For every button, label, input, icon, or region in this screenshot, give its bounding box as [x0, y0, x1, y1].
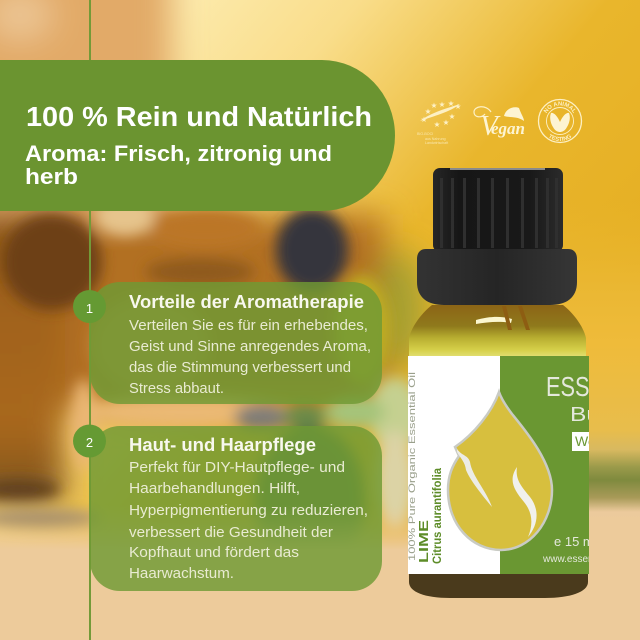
bottle glass shoulder — [409, 305, 586, 358]
icon: EU organic leaf — [417, 99, 462, 145]
panel 1 body text: Stress abbaut. — [129, 381, 224, 397]
number badge 2 — [73, 424, 106, 458]
icon: EU organic leaf: ★ — [443, 118, 450, 127]
subtitle — [25, 141, 332, 189]
bottle — [407, 168, 604, 598]
subtitle: Aroma: Frisch, zitronig und — [25, 141, 332, 166]
drop emblem — [448, 392, 552, 550]
number badge 1: 1 — [86, 301, 93, 316]
icon: EU organic leaf: ★ — [434, 120, 441, 129]
label side text: Citrus aurantifolia — [432, 467, 444, 564]
icon: EU organic leaf: ★ — [439, 100, 446, 109]
icon: no animal testing: TESTING — [549, 134, 572, 141]
icon: EU organic leaf: ★ — [421, 115, 428, 124]
panel 2 body text: Haarbehandlungen. Hilft, — [129, 481, 300, 497]
icon: no animal testing — [538, 98, 582, 144]
panel 2 body text: verbessert die Gesundheit der — [129, 525, 333, 541]
number badge 2: 2 — [86, 435, 93, 450]
panel 1: Vorteile der Aromatherapie — [90, 282, 382, 404]
icon: no animal testing: NO ANIMAL — [544, 102, 576, 114]
icon: EU organic leaf: ★ — [448, 99, 455, 108]
cap collar — [417, 249, 577, 305]
icon: EU organic leaf: ★ — [425, 107, 432, 116]
brand text: www.essen — [542, 554, 594, 565]
brand text: e 15 ml — [554, 534, 597, 549]
panel 1 body text: Geist und Sinne anregendes Aroma, — [129, 339, 371, 355]
label side text: 100% Pure Organic Essential Oil — [407, 372, 418, 561]
panel 1 body text — [129, 318, 371, 397]
timeline vertical line — [89, 0, 91, 640]
subtitle: herb — [25, 164, 78, 189]
title: 100 % Rein und Natürlich: 100 % Rein und Natürlich — [26, 101, 372, 132]
label side text — [408, 372, 441, 564]
brand text: Bu — [570, 404, 600, 426]
brand text: We — [575, 433, 596, 449]
icon: EU organic leaf: BIO-BOCI — [417, 132, 433, 136]
panel 2: Haut- und Haarpflege — [90, 426, 382, 591]
icon: EU organic leaf: ★ — [449, 112, 456, 121]
brand text — [543, 376, 589, 562]
cap — [417, 168, 577, 305]
icon: vegan — [474, 107, 525, 142]
label — [407, 356, 604, 574]
panel 1 body text: das die Stimmung verbessert und — [129, 360, 351, 376]
panel 2 body text — [129, 460, 368, 582]
panel 2 body text: Hyperpigmentierung zu reduzieren, — [129, 503, 368, 519]
brand text: ESSE — [546, 371, 604, 402]
panel 2 heading: Haut- und Haarpflege — [129, 435, 316, 455]
panel 1 body text: Verteilen Sie es für ein erhebendes, — [129, 318, 368, 334]
title banner — [0, 60, 395, 211]
panel 2 body text: Haarwachstum. — [129, 566, 234, 582]
label side text: LIME — [416, 520, 431, 563]
panel 2 body text: Perfekt für DIY-Hautpflege- und — [129, 460, 345, 476]
bottle base — [409, 570, 588, 598]
icon: vegan: egan — [491, 119, 525, 138]
icon: EU organic leaf: Landwirtschaft — [425, 141, 448, 145]
icon: EU organic leaf: ★ — [455, 102, 462, 111]
panel 2 body text: Kopfhaut und fördert das — [129, 545, 299, 561]
icon: vegan: V — [480, 110, 501, 142]
number badge 1 — [73, 290, 106, 323]
icon: EU organic leaf: ★ — [431, 101, 438, 110]
panel 1 heading: Vorteile der Aromatherapie — [129, 292, 364, 312]
icon: EU organic leaf: aus Nahrung — [425, 137, 446, 141]
